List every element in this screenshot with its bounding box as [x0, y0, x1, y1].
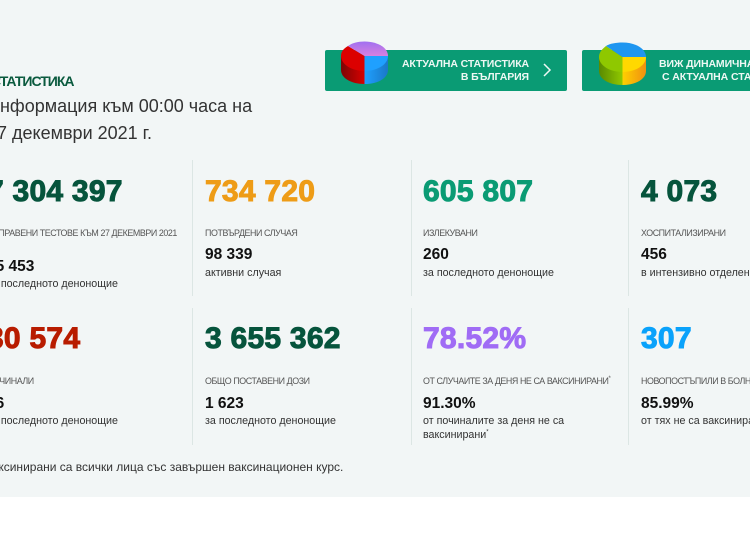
stat: doses [205, 322, 341, 427]
label: ПОТВЪРДЕНИ СЛУЧАЯ [205, 228, 297, 238]
value: 3 655 362 [205, 322, 341, 355]
value: 605 807 [423, 175, 533, 208]
value: 78.52% [423, 322, 526, 355]
label: ХОСПИТАЛИЗИРАНИ [641, 228, 726, 238]
intro text [0, 96, 252, 143]
button: dynamic current statistics [582, 50, 750, 91]
stat: confirmed [205, 175, 315, 279]
label: ОБЩО ПОСТАВЕНИ ДОЗИ [205, 376, 310, 386]
button label [402, 58, 529, 83]
stat: deaths [0, 322, 118, 427]
chevron arrow [544, 64, 551, 76]
unvaccinated value: 85.99% [641, 395, 694, 412]
icon: red pie chart [341, 42, 388, 84]
button: current statistics in Bulgaria [325, 50, 567, 91]
ICU value: 456 [641, 246, 667, 263]
value: 307 [641, 322, 692, 355]
icon: green pie chart [599, 42, 646, 85]
daily value: 1 623 [205, 395, 244, 412]
deaths share label: от починалите за деня не са [423, 415, 564, 427]
deaths share label: ваксинирани* [423, 428, 489, 440]
deaths share label [423, 415, 564, 440]
label: ОТ СЛУЧАИТЕ ЗА ДЕНЯ НЕ СА ВАКСИНИРАНИ* [423, 376, 610, 386]
value: 734 720 [205, 175, 315, 208]
stat: tests [0, 175, 177, 290]
active label: активни случая [205, 267, 281, 279]
label: ИЗЛЕКУВАНИ [423, 228, 477, 238]
stat: new hospital admissions [641, 322, 750, 427]
stat: recovered [423, 175, 554, 279]
daily label: за последното денонощие [423, 267, 554, 279]
deaths share value: 91.30% [423, 395, 476, 412]
active value: 98 339 [205, 246, 252, 263]
button label [659, 58, 750, 83]
dividers [192, 160, 193, 296]
daily value: 260 [423, 246, 449, 263]
button label: В БЪЛГАРИЯ [461, 71, 529, 83]
button label: АКТУАЛНА СТАТИСТИКА [402, 58, 529, 70]
value: 4 073 [641, 175, 717, 208]
stat: hospitalized [640, 175, 750, 279]
stat: unvaccinated share [423, 322, 611, 440]
daily label: за последното денонощие [205, 415, 336, 427]
